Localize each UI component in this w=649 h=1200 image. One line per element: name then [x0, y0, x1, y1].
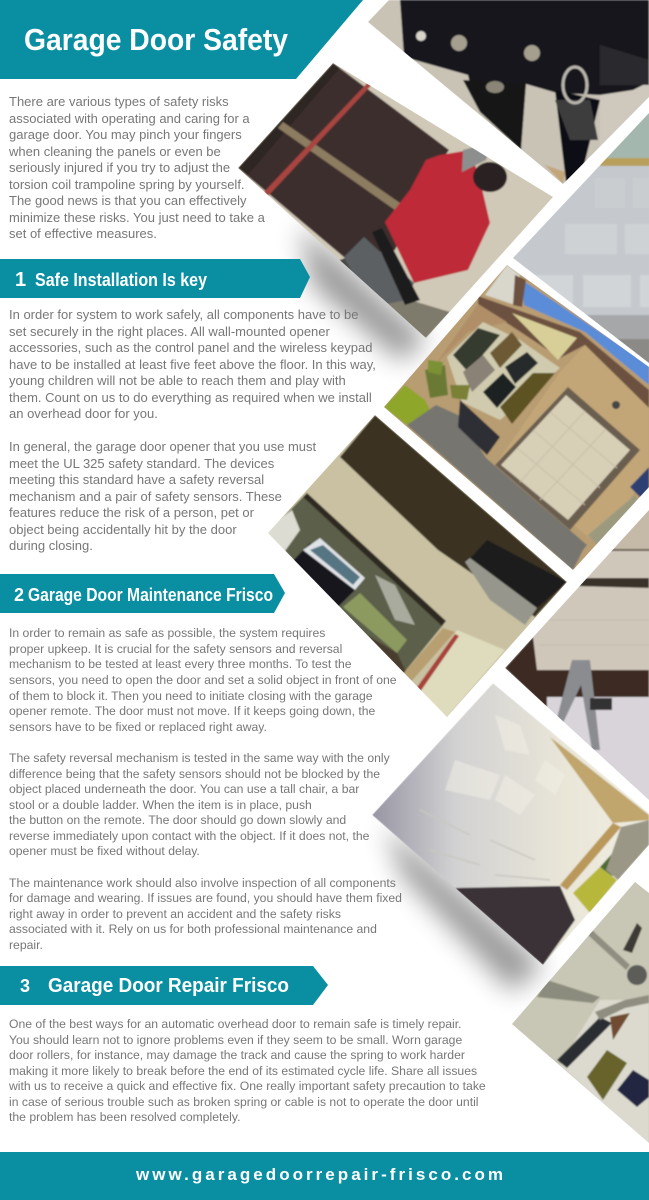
window view [285, 496, 443, 671]
section banner 3: Garage Door Repair Frisco [48, 975, 289, 997]
window frame [447, 322, 560, 420]
brick around door [503, 345, 648, 535]
section 3 paragraph: in case of serious trouble such as broken spring or cable is not to operate the door until [9, 1094, 478, 1108]
section 1 paragraph 1: an overhead door for you. [9, 406, 158, 421]
section banner 2: 2 [14, 585, 24, 605]
intro text: associated with operating and caring for a [9, 111, 250, 126]
section 1 paragraph 1: set securely in the right places. All wall-mounted opener [9, 324, 330, 338]
section 2 paragraph 3: right away in order to prevent an accident and the safety risks [9, 907, 341, 921]
upper brick [441, 305, 507, 358]
section 1 paragraph 1: them. Count on us to do everything as required when we install [9, 390, 372, 404]
section banner 1: Safe Installation Is key [35, 270, 207, 290]
section 1 paragraph 1: accessories, such as the control panel and the wireless keypad [9, 340, 372, 355]
section 1 paragraph 2 [9, 439, 316, 553]
sky [522, 280, 649, 385]
section 2 paragraph 3 [9, 876, 402, 952]
section 2 paragraph 1 [9, 626, 397, 734]
intro text: There are various types of safety risks [9, 94, 229, 109]
section 1 paragraph 2: during closing. [9, 538, 93, 553]
section 2 paragraph 2: The safety reversal mechanism is tested in the same way with the only [9, 751, 390, 765]
intro text: garage door. You may pinch your fingers [9, 127, 242, 142]
section 2 paragraph 2: difference being that the safety sensors should not be blocked by the [9, 767, 380, 781]
intro text: minimize these risks. You just need to take a [9, 210, 265, 225]
grass [384, 385, 435, 425]
photo: grey raised-panel door [510, 110, 649, 369]
footer band: www.garagedoorrepair-frisco.com [135, 1165, 503, 1184]
photo: garage opener and van through window [262, 410, 572, 720]
section 2 paragraph 2: opener must be fixed without delay. [9, 844, 200, 858]
garage door [495, 387, 640, 530]
section 2 paragraph 1: mechanism to be tested at least every three months. To test the [9, 657, 352, 671]
section 2 paragraph 3: The maintenance work should also involve inspection of all components [9, 876, 396, 890]
intro text: when cleaning the panels or even be [9, 144, 221, 159]
photo: white brick wall and ladder [500, 505, 649, 807]
intro text: seriously injured if you try to adjust the [9, 160, 230, 175]
section 2 paragraph 1: In order to remain as safe as possible, the system requires [9, 626, 325, 640]
section 2 paragraph 2: reverse immediately upon contact with the object. If it does not, the [9, 829, 369, 843]
section 2 paragraph 3: repair. [9, 938, 43, 952]
section 3 paragraph: the problem has been resolved completely. [9, 1110, 240, 1124]
section 2 paragraph 2: stool or a double ladder. When the item is in place, push [9, 798, 312, 812]
roof edge [478, 296, 649, 408]
section 1 paragraph 2: meet the UL 325 safety standard. The devices [9, 456, 274, 470]
van [294, 542, 360, 606]
section 1 paragraph 1: young children will not be able to reach them and play with [9, 373, 346, 388]
section 2 paragraph 1: of them to block it. Then you need to initiate closing with the garage [9, 689, 373, 703]
section 2 paragraph 3: for damage and wearing. If issues are found, you should have them fixed [9, 891, 402, 905]
intro text: set of effective measures. [9, 226, 157, 241]
section 1 paragraph 2: In general, the garage door opener that you use must [9, 439, 316, 454]
section 2 paragraph 1: proper upkeep. It is crucial for the safety sensors and reversal [9, 642, 342, 656]
white siding [485, 265, 520, 305]
section 3 paragraph: door rollers, for instance, may damage the track and cause the spring to work harder [9, 1048, 465, 1062]
photo: technician in red shirt [230, 58, 560, 345]
section 1 paragraph 1: In order for system to work safely, all components have to be [9, 307, 358, 322]
section 1 paragraph 2: features reduce the risk of a person, pet or [9, 505, 254, 520]
section 3 paragraph [9, 1017, 486, 1124]
section 2 paragraph 3: associated with it. Rely on us for both professional maintenance and [9, 922, 377, 936]
section 2 paragraph 2 [9, 751, 390, 858]
driveway [407, 405, 587, 570]
solar panel [630, 467, 649, 497]
section 1 paragraph 2: object being accidentally hit by the door [9, 522, 237, 536]
section 3 paragraph: You should learn not to ignore problems even if they seem to be small. Worn garage [9, 1032, 462, 1046]
photo: white garage door interior [372, 683, 649, 965]
section banner 1: 1 [15, 269, 26, 291]
section 1 paragraph 2: meeting this standard have a safety reversal [9, 472, 264, 487]
section 1 paragraph 1: have to be installed at least five feet above the floor. In this way, [9, 356, 376, 372]
intro text: torsion coil trampoline spring by yourself. [9, 177, 245, 192]
section 2 paragraph 1: sensors have to be fixed or replaced right away. [9, 720, 267, 734]
section 2 paragraph 1: opener remote. The door must not move. If it keeps going down, the [9, 704, 375, 718]
section banner 2 [0, 574, 285, 613]
section 1 paragraph 2: mechanism and a pair of safety sensors. These [9, 488, 282, 504]
intro text [9, 94, 265, 241]
gable [512, 313, 577, 360]
intro text: The good news is that you can effectively [9, 193, 247, 208]
section banner 3 [0, 966, 328, 1005]
section 3 paragraph: with us to receive a quick and effective fix. One really important safety precaution to take [9, 1079, 486, 1093]
photo: opener bracket [360, 0, 649, 190]
section 1 paragraph 1 [9, 307, 376, 421]
shadows under photos [300, 225, 543, 992]
trim post [513, 275, 526, 307]
section 3 paragraph: One of the best ways for an automatic overhead door to remain safe is timely repair. [9, 1017, 462, 1031]
section 2 paragraph 2: the button on the remote. The door should go down slowly and [9, 813, 346, 827]
title banner [0, 0, 363, 79]
footer band [0, 1152, 649, 1200]
section banner 3: 3 [20, 976, 30, 996]
photo: door track and spring [505, 875, 649, 1150]
steps [458, 400, 500, 455]
title: Garage Door Safety [24, 22, 289, 57]
section 2 paragraph 1: sensors, you need to open the door and set a solid object in front of one [9, 673, 397, 687]
opener [467, 540, 567, 608]
section banner 2: Garage Door Maintenance Frisco [28, 585, 273, 605]
photo: brick house with garage door [380, 260, 649, 575]
section 2 paragraph 2: object placed underneath the door. You can use a tall chair, a bar [9, 782, 359, 796]
lawn [343, 593, 407, 653]
section banner 1 [0, 259, 310, 298]
section 3 paragraph: making it more likely to break before the end of its estimated cycle life. Share all issues [9, 1064, 477, 1078]
cream wall [417, 630, 505, 717]
